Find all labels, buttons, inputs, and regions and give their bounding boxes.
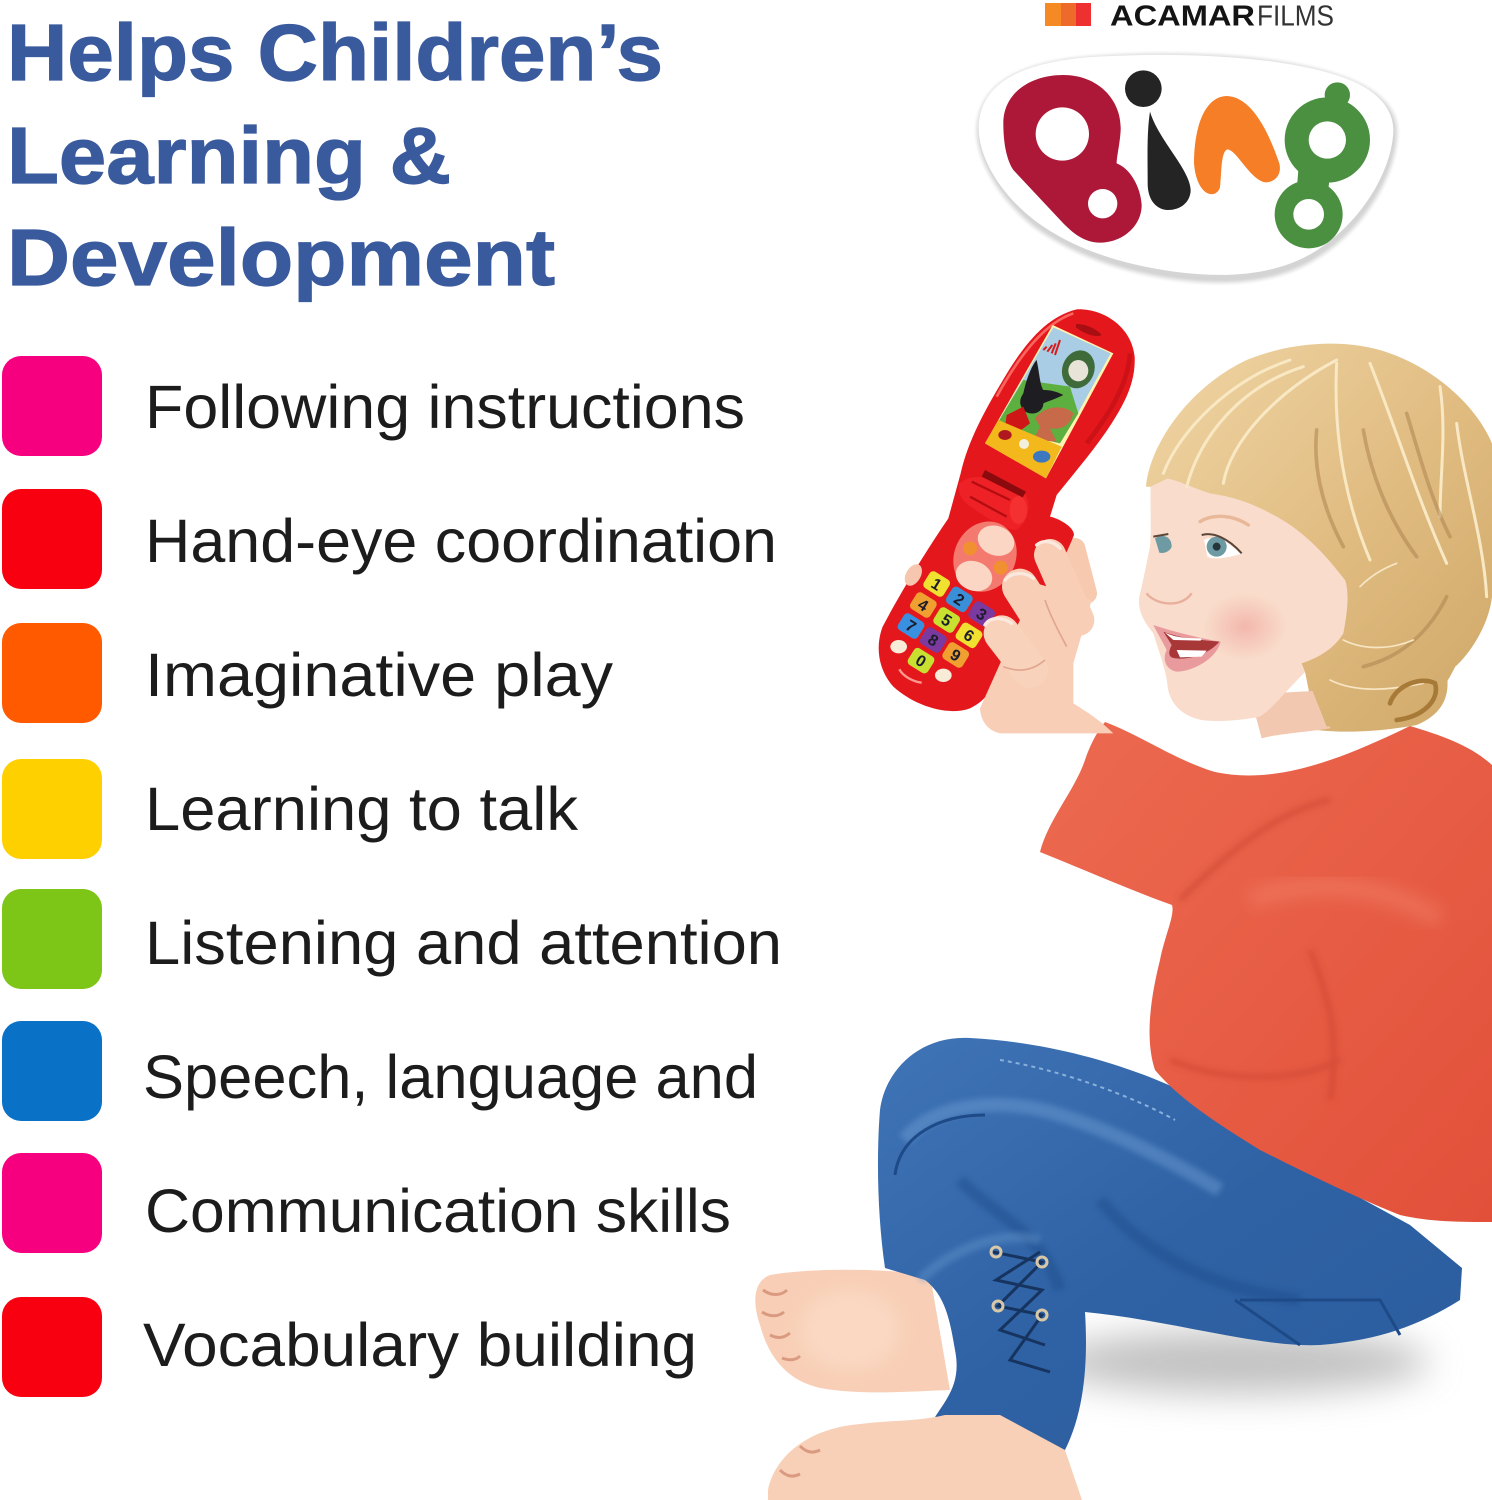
phone keypad: 7 [902, 617, 919, 637]
eyes [1204, 538, 1241, 558]
phone keypad: 8 [924, 631, 941, 651]
hair fringe and strands [1147, 347, 1492, 727]
phone keypad [890, 570, 997, 683]
list item: following instructions: Following instructions [145, 373, 745, 441]
list item: vocabulary building: Vocabulary building [143, 1311, 697, 1379]
mouth [1153, 625, 1221, 672]
phone body [879, 309, 1135, 711]
phone keypad: 4 [914, 596, 931, 616]
letter B [1003, 75, 1142, 243]
speaker slot [1076, 324, 1102, 336]
list item: speech, language and [2, 1021, 758, 1121]
list item: hand-eye coordination: Hand-eye coordination [145, 507, 777, 575]
list item: listening and attention: Listening and attention [145, 909, 782, 977]
list item: hand-eye coordination [2, 489, 777, 589]
far finger [1075, 548, 1087, 593]
list item: imaginative play: Imaginative play [145, 641, 614, 709]
hair back [1146, 344, 1492, 732]
face [1139, 453, 1360, 721]
letter g [1275, 82, 1370, 248]
list item: imaginative play [2, 623, 614, 723]
skills list [2, 356, 782, 1397]
sweater [1040, 722, 1492, 1222]
list item: communication skills [2, 1153, 731, 1253]
phone keypad: 2 [950, 591, 967, 610]
letter i [1125, 70, 1162, 107]
phone keypad: 6 [960, 627, 977, 646]
phone keypad: 9 [947, 646, 963, 666]
child illustration [755, 309, 1492, 1500]
head and hair [1139, 344, 1492, 738]
heading [7, 8, 663, 302]
list item: following instructions [2, 356, 745, 456]
near foot [768, 1415, 1082, 1500]
list item: vocabulary building [2, 1297, 697, 1397]
acamar films logo: ACAMAR [1110, 0, 1255, 32]
far foot [755, 1270, 950, 1392]
nose [1147, 593, 1192, 603]
phone keypad: 5 [938, 611, 954, 631]
phone hinge [959, 477, 1028, 530]
list item: learning to talk [2, 759, 579, 859]
letter n [1194, 96, 1280, 194]
phone buttons [942, 511, 1028, 602]
acamar films logo [1045, 0, 1334, 32]
list item: communication skills: Communication skills [145, 1177, 731, 1245]
jeans [878, 1038, 1462, 1450]
heading: Helps Children’s [7, 8, 663, 97]
list item: speech, language and: Speech, language and [143, 1043, 758, 1111]
phone keypad: 3 [973, 605, 989, 625]
list item: learning to talk: Learning to talk [145, 775, 579, 843]
bing logo [977, 54, 1397, 283]
eyebrow [1200, 516, 1248, 525]
phone screen [985, 325, 1113, 478]
phone keypad: 0 [912, 652, 929, 671]
heading: Development [7, 213, 555, 302]
toy flip phone [879, 309, 1135, 733]
hand [901, 542, 1113, 733]
ankle lacing [991, 1247, 1050, 1372]
heading: Learning & [7, 111, 451, 200]
list item: listening and attention [2, 889, 782, 989]
phone keypad: 1 [928, 575, 944, 595]
acamar films logo: FILMS [1257, 0, 1334, 32]
floor shadow [1050, 1330, 1430, 1394]
neck [1255, 690, 1330, 738]
